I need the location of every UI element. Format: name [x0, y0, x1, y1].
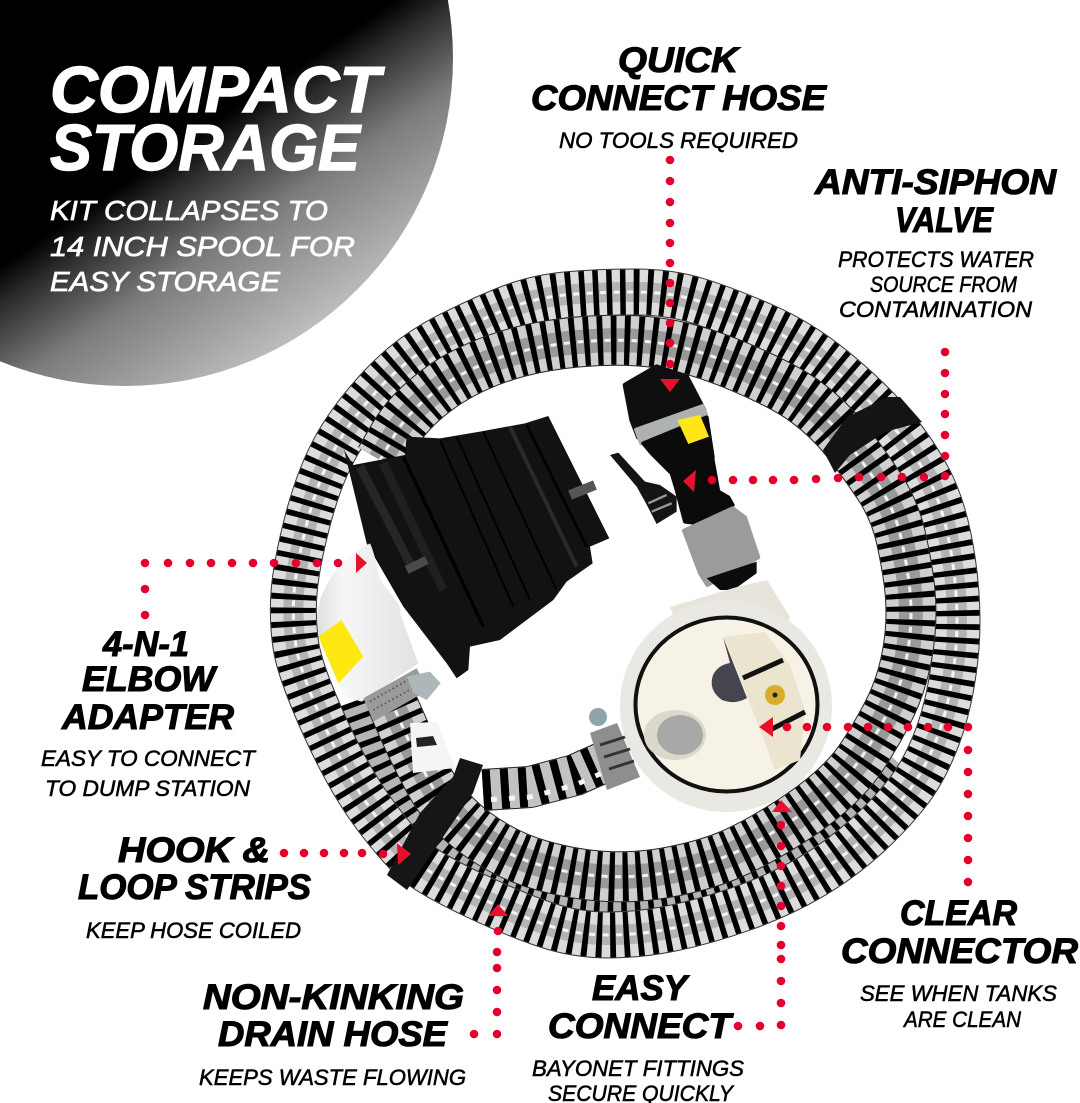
valve yellow label	[677, 415, 709, 444]
coiled drain hose	[293, 292, 957, 935]
callout: non-kinking drain hose	[199, 904, 508, 1090]
heading: HOOK &	[118, 831, 270, 870]
description: NO TOOLS REQUIRED	[559, 128, 798, 153]
heading: LOOP STRIPS	[78, 868, 311, 907]
reducer body	[344, 416, 609, 678]
heading: compact storage: STORAGE	[50, 111, 362, 184]
heading: compact storage	[50, 53, 385, 184]
arrowhead	[397, 843, 411, 865]
connector o-ring	[636, 618, 818, 792]
heading: DRAIN HOSE	[218, 1015, 449, 1054]
description	[532, 1056, 744, 1103]
text block: compact storage description	[50, 195, 355, 297]
callout: 4-n-1 elbow adapter	[41, 553, 367, 801]
heading: EASY	[592, 969, 690, 1008]
description: SEE WHEN TANKS	[860, 981, 1057, 1006]
heading	[203, 978, 464, 1054]
leader dots	[708, 348, 949, 484]
coupler stub	[707, 562, 757, 590]
heading: compact storage: COMPACT	[50, 53, 385, 126]
description: EASY TO CONNECT	[41, 746, 257, 771]
text block: compact storage description: 14 INCH SPOOL FOR	[50, 231, 355, 262]
text block: compact storage description: EASY STORAGE	[50, 266, 280, 297]
hose clamp	[363, 668, 441, 722]
connector aluminum port	[644, 710, 706, 760]
white elbow adapter	[317, 543, 441, 722]
heading	[531, 41, 828, 118]
connector internal tube	[724, 632, 805, 770]
heading: ANTI-SIPHON	[814, 163, 1057, 202]
connector hose clamp	[589, 708, 640, 790]
hose strand: inner coil	[380, 340, 911, 877]
description: SOURCE FROM	[870, 272, 1017, 297]
heading: NON-KINKING	[203, 978, 464, 1017]
callout: clear connector	[759, 717, 1079, 1032]
heading	[814, 163, 1057, 240]
leader dots	[734, 821, 785, 1030]
heading	[78, 831, 311, 907]
callout: hook and loop strips	[78, 831, 411, 943]
heading: ELBOW	[82, 660, 218, 699]
clear connector	[589, 580, 832, 812]
heading	[548, 969, 734, 1046]
black reducer adapter	[344, 416, 609, 678]
background panel: compact storage circle	[0, 0, 453, 386]
valve cap	[625, 367, 704, 437]
description: BAYONET FITTINGS	[532, 1056, 744, 1081]
arrowhead	[356, 553, 367, 573]
hose strand: connector hose	[483, 755, 620, 800]
description: ARE CLEAN	[902, 1007, 1022, 1032]
reducer highlights	[360, 425, 595, 627]
heading: CLEAR	[900, 894, 1018, 933]
connector housing	[620, 600, 832, 812]
description: TO DUMP STATION	[45, 776, 251, 801]
description	[838, 247, 1034, 322]
callout: quick connect hose	[531, 41, 828, 392]
connector dark float	[712, 637, 747, 702]
brass nozzle	[765, 685, 785, 705]
connector top lug	[670, 580, 790, 640]
arrowhead	[660, 379, 680, 392]
valve gray ring	[635, 405, 707, 444]
heading: CONNECTOR	[841, 932, 1079, 971]
arrowhead	[759, 717, 773, 737]
description: KEEPS WASTE FLOWING	[199, 1065, 466, 1090]
description: CONTAMINATION	[839, 297, 1033, 322]
callout: easy connect	[532, 800, 792, 1103]
text block: compact storage description: KIT COLLAPSES TO	[50, 195, 328, 226]
heading: QUICK	[618, 41, 741, 80]
leader dots	[783, 723, 972, 886]
hose label tag	[410, 722, 455, 773]
leader dots	[280, 849, 387, 858]
heading: ADAPTER	[61, 698, 235, 737]
heading	[61, 625, 235, 737]
arrowhead	[683, 470, 696, 492]
hose strand: hidden middle coil	[358, 700, 895, 906]
arrowhead	[488, 904, 508, 916]
anti-siphon valve and quick connect fitting	[610, 367, 758, 590]
elbow body	[317, 543, 418, 702]
hook and loop strap: lower left	[387, 758, 483, 890]
gray hose coupler	[684, 508, 758, 585]
elbow yellow label	[318, 620, 363, 683]
hose strand: outer coil	[293, 292, 957, 935]
hook and loop strap: upper right	[823, 397, 922, 473]
valve body	[643, 417, 733, 523]
description	[860, 981, 1057, 1032]
description: KEEP HOSE COILED	[86, 918, 301, 943]
heading: CONNECT HOSE	[531, 79, 828, 118]
valve lever	[610, 453, 677, 524]
description: PROTECTS WATER	[838, 247, 1034, 272]
callout: anti-siphon valve	[683, 163, 1057, 492]
leader dots	[470, 927, 502, 1038]
heading: CONNECT	[548, 1007, 734, 1046]
leader dots	[141, 559, 342, 619]
description	[41, 746, 257, 801]
heading: VALVE	[895, 201, 994, 240]
arrowhead	[772, 800, 792, 812]
leader dots	[666, 156, 674, 368]
heading: 4-N-1	[102, 625, 189, 664]
heading	[841, 894, 1079, 971]
